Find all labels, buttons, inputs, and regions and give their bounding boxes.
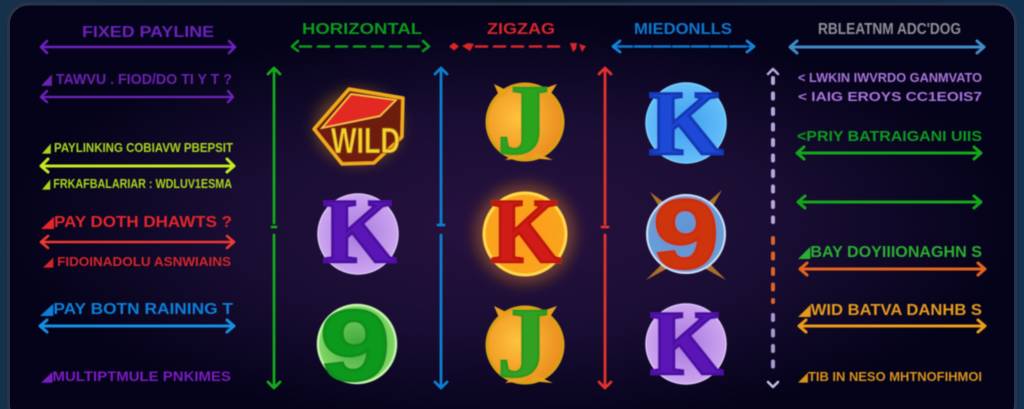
text: lime line two: ◢ FRKAFBALARIAR : WDLUV1ESMA	[42, 176, 232, 191]
heading: horizontal: HORIZONTAL	[302, 21, 422, 38]
text: purple line: ◢ TAWVU . FIOD/DO TI Y T ?	[41, 71, 232, 88]
text: orange heading: ◢WID BATVA DANHB S	[798, 302, 982, 319]
symbol: orange J bottom	[487, 287, 563, 398]
arrow: dotted lavender vertical	[768, 69, 778, 387]
arrow: green one	[797, 147, 981, 159]
heading: fixed payline: FIXED PAYLINE	[82, 24, 214, 41]
arrow: purple	[41, 41, 235, 53]
arrow: red	[41, 236, 234, 248]
heading: middle: MIEDONLLS	[634, 21, 732, 38]
symbol: orange J top	[487, 64, 563, 175]
arrow: purple wavy	[43, 96, 232, 98]
symbol: purple K bottom: K	[650, 292, 723, 394]
text: green heading: ◢BAY DOYIIIONAGHN S	[798, 244, 982, 261]
left column: fixed payline	[40, 24, 235, 384]
symbol: wild: WILD	[331, 120, 400, 161]
arrow: green vertical	[268, 68, 280, 388]
heading: zigzag: ZIGZAG	[487, 21, 555, 38]
heading: right grey: RBLEATNM ADC'DOG	[818, 21, 961, 38]
symbol: orange J top: J	[497, 64, 549, 175]
text: blue heading: ◢PAY BOTN RAINING T	[40, 301, 233, 318]
column headings	[292, 21, 754, 52]
symbol: red 9: 9	[653, 179, 719, 289]
text: lime line one: ◢ PAYLINKING COBIAVW PBEPSIT	[42, 140, 233, 155]
arrow: green two	[798, 196, 981, 208]
arrowheads: red	[449, 42, 586, 52]
right column: payline types	[790, 21, 985, 384]
text: lavender line two: < IAIG EROYS CC1EOIS7	[798, 89, 982, 104]
symbol: red K center: K	[491, 180, 561, 282]
arrow: orange red	[800, 263, 985, 275]
symbol: blue K: K	[649, 72, 723, 174]
arrow: orange	[799, 320, 985, 332]
arrow: red vertical	[599, 68, 611, 388]
symbol: green 9: 9	[320, 290, 390, 402]
symbol: wild	[314, 89, 403, 165]
arrowheads: purple wavy	[41, 91, 233, 102]
text: red heading: ◢PAY DOTH DHAWTS ?	[41, 214, 232, 231]
arrow: steel blue	[790, 41, 984, 53]
symbol: red 9	[646, 179, 726, 289]
vertical arrows	[268, 68, 778, 388]
reel symbols	[314, 64, 726, 402]
symbol: orange J bottom: J	[497, 287, 549, 398]
arrow: blue vertical	[435, 68, 447, 388]
arrow: green dashed	[300, 45, 422, 48]
symbol: purple K middle: K	[323, 180, 396, 282]
arrow: blue	[40, 320, 234, 332]
text: purple footer: ◢MULTIPTMULE PNKIMES	[41, 368, 231, 384]
text: orange footer: ◢TIB IN NESO MHTNOFIHMOI	[798, 369, 982, 384]
text: green line: <PRIY BATRAIGANI UIIS	[797, 128, 982, 145]
text: red line: ◢ FIDOINADOLU ASNWIAINS	[43, 254, 231, 269]
arrowheads: green	[292, 41, 429, 51]
arrow: blue dashed	[616, 45, 752, 48]
arrowheads: blue	[613, 41, 754, 52]
arrow: lime	[41, 159, 234, 172]
arrow: red dashed	[476, 45, 562, 48]
text: lavender line one: < LWKIN IWVRDO GANMVATO	[798, 70, 982, 85]
